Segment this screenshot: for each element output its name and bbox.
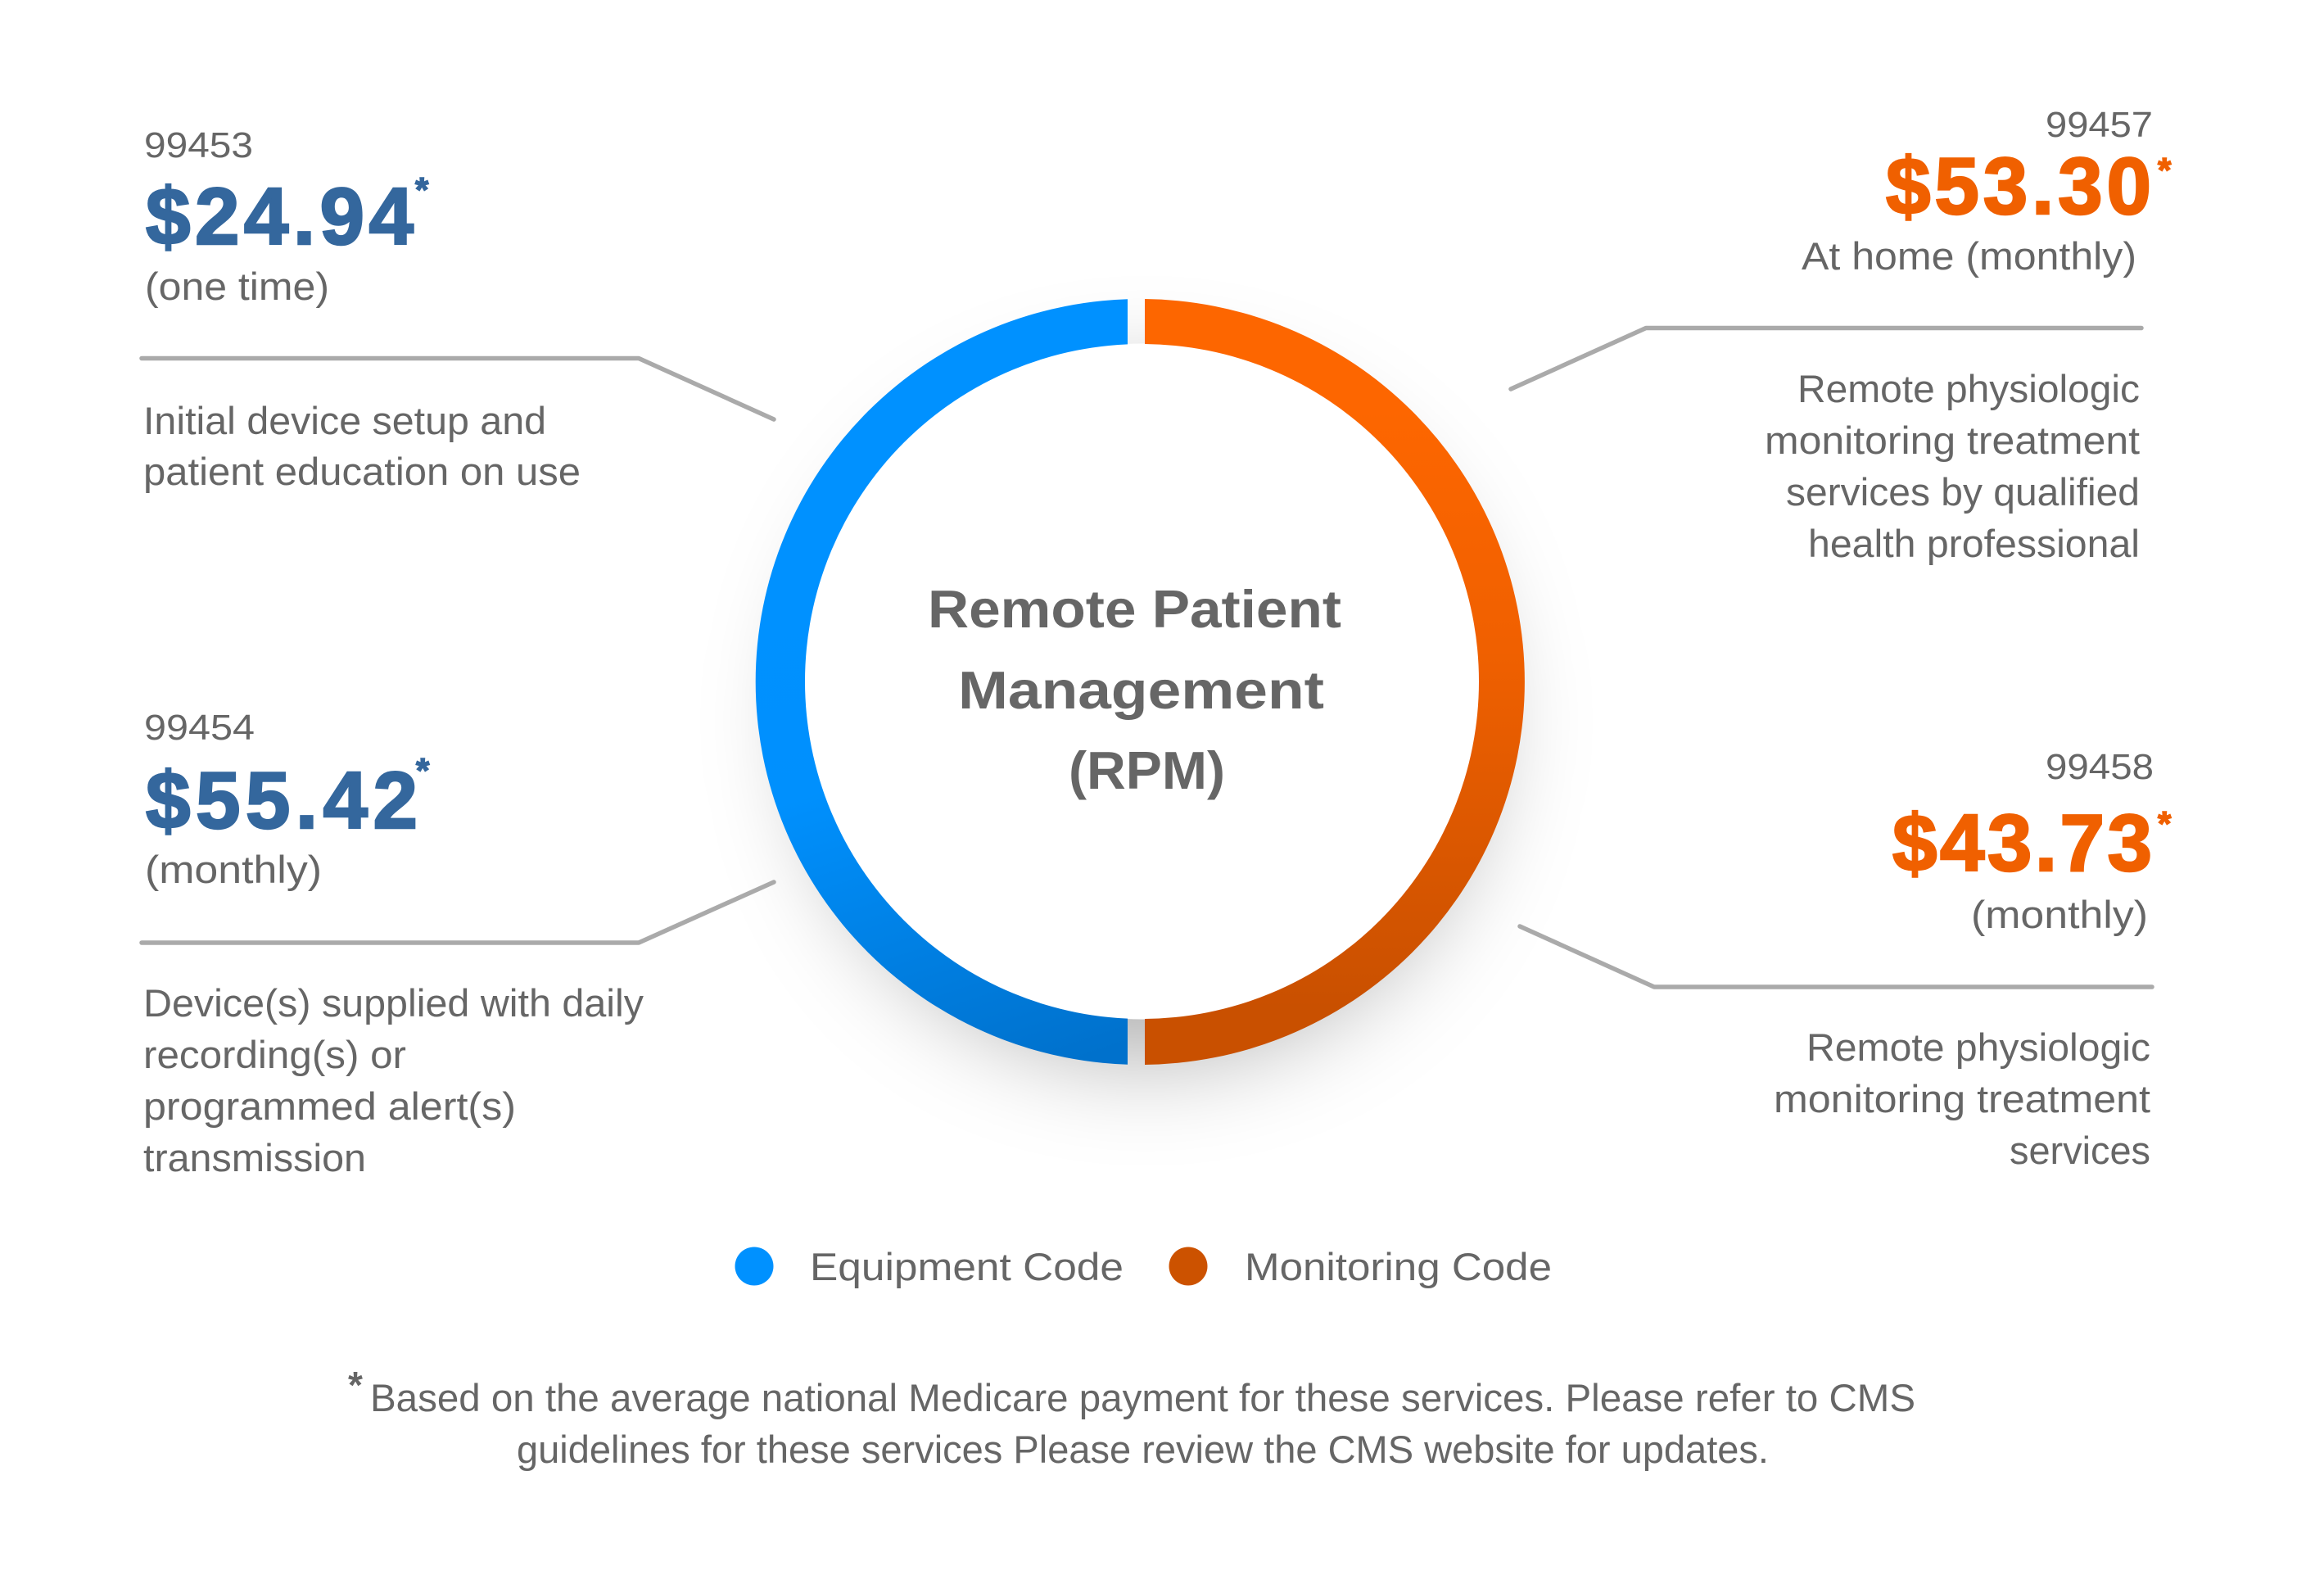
leader line xyxy=(1511,328,2141,389)
code label: 99453 xyxy=(144,125,253,165)
asterisk: * xyxy=(415,170,429,209)
price: $55.42 xyxy=(146,755,418,845)
panel: central ring xyxy=(756,299,1525,1065)
description: services by qualified xyxy=(1786,470,2140,514)
code label: 99458 xyxy=(2046,747,2154,787)
asterisk: * xyxy=(2158,804,2172,843)
equipment arc (blue) xyxy=(755,299,1128,1065)
legend dot: monitoring xyxy=(1169,1247,1207,1286)
leader line xyxy=(142,882,774,943)
white centre disc xyxy=(804,344,1479,1019)
centre title xyxy=(928,579,1341,800)
description: services xyxy=(2010,1129,2150,1172)
description: health professional xyxy=(1808,522,2140,565)
centre title: Remote Patient xyxy=(928,579,1341,639)
legend xyxy=(735,1245,1552,1288)
description: Device(s) supplied with daily xyxy=(143,981,644,1025)
frequency: At home (monthly) xyxy=(1802,234,2136,278)
description: Remote physiologic xyxy=(1797,367,2140,410)
centre title: (RPM) xyxy=(1069,740,1225,800)
asterisk: * xyxy=(416,751,430,790)
description: Remote physiologic xyxy=(1806,1025,2150,1069)
description: monitoring treatment xyxy=(1765,419,2140,462)
price: $24.94 xyxy=(146,171,414,261)
legend label: monitoring: Monitoring Code xyxy=(1245,1245,1552,1288)
footnote text line one: Based on the average national Medicare payment for these services. Please refer to CMS xyxy=(370,1376,1915,1419)
description: recording(s) or xyxy=(143,1033,406,1076)
monitoring arc (orange) xyxy=(1145,299,1525,1065)
footnote xyxy=(348,1364,1915,1471)
frequency: (monthly) xyxy=(145,848,322,891)
leader line xyxy=(1520,926,2152,987)
frequency: (monthly) xyxy=(1971,893,2148,936)
description xyxy=(1765,367,2140,565)
description xyxy=(143,399,581,493)
ring drop shadow xyxy=(807,381,1486,1061)
description: monitoring treatment xyxy=(1774,1077,2150,1120)
description: programmed alert(s) xyxy=(143,1084,516,1128)
description xyxy=(1774,1025,2150,1172)
code label: 99457 xyxy=(2046,105,2153,145)
centre title: Management xyxy=(958,660,1324,720)
panel: code 99458 xyxy=(1520,747,2172,1172)
panel: code 99457 xyxy=(1511,105,2172,565)
asterisk: * xyxy=(2158,151,2172,189)
price: $53.30 xyxy=(1886,141,2151,231)
legend label: equipment: Equipment Code xyxy=(810,1245,1124,1288)
leader line xyxy=(142,359,774,419)
panel: code 99453 xyxy=(142,125,774,493)
description: Initial device setup and xyxy=(143,399,546,442)
description: transmission xyxy=(143,1136,366,1179)
panel: code 99454 xyxy=(142,708,774,1179)
footnote asterisk: * xyxy=(348,1364,363,1406)
description xyxy=(143,981,644,1179)
footnote text line two: guidelines for these services Please review the CMS website for updates. xyxy=(517,1428,1769,1471)
legend dot: equipment xyxy=(735,1247,773,1286)
price: $43.73 xyxy=(1892,798,2152,888)
frequency: (one time) xyxy=(145,265,329,308)
description: patient education on use xyxy=(143,450,581,493)
code label: 99454 xyxy=(144,708,255,748)
